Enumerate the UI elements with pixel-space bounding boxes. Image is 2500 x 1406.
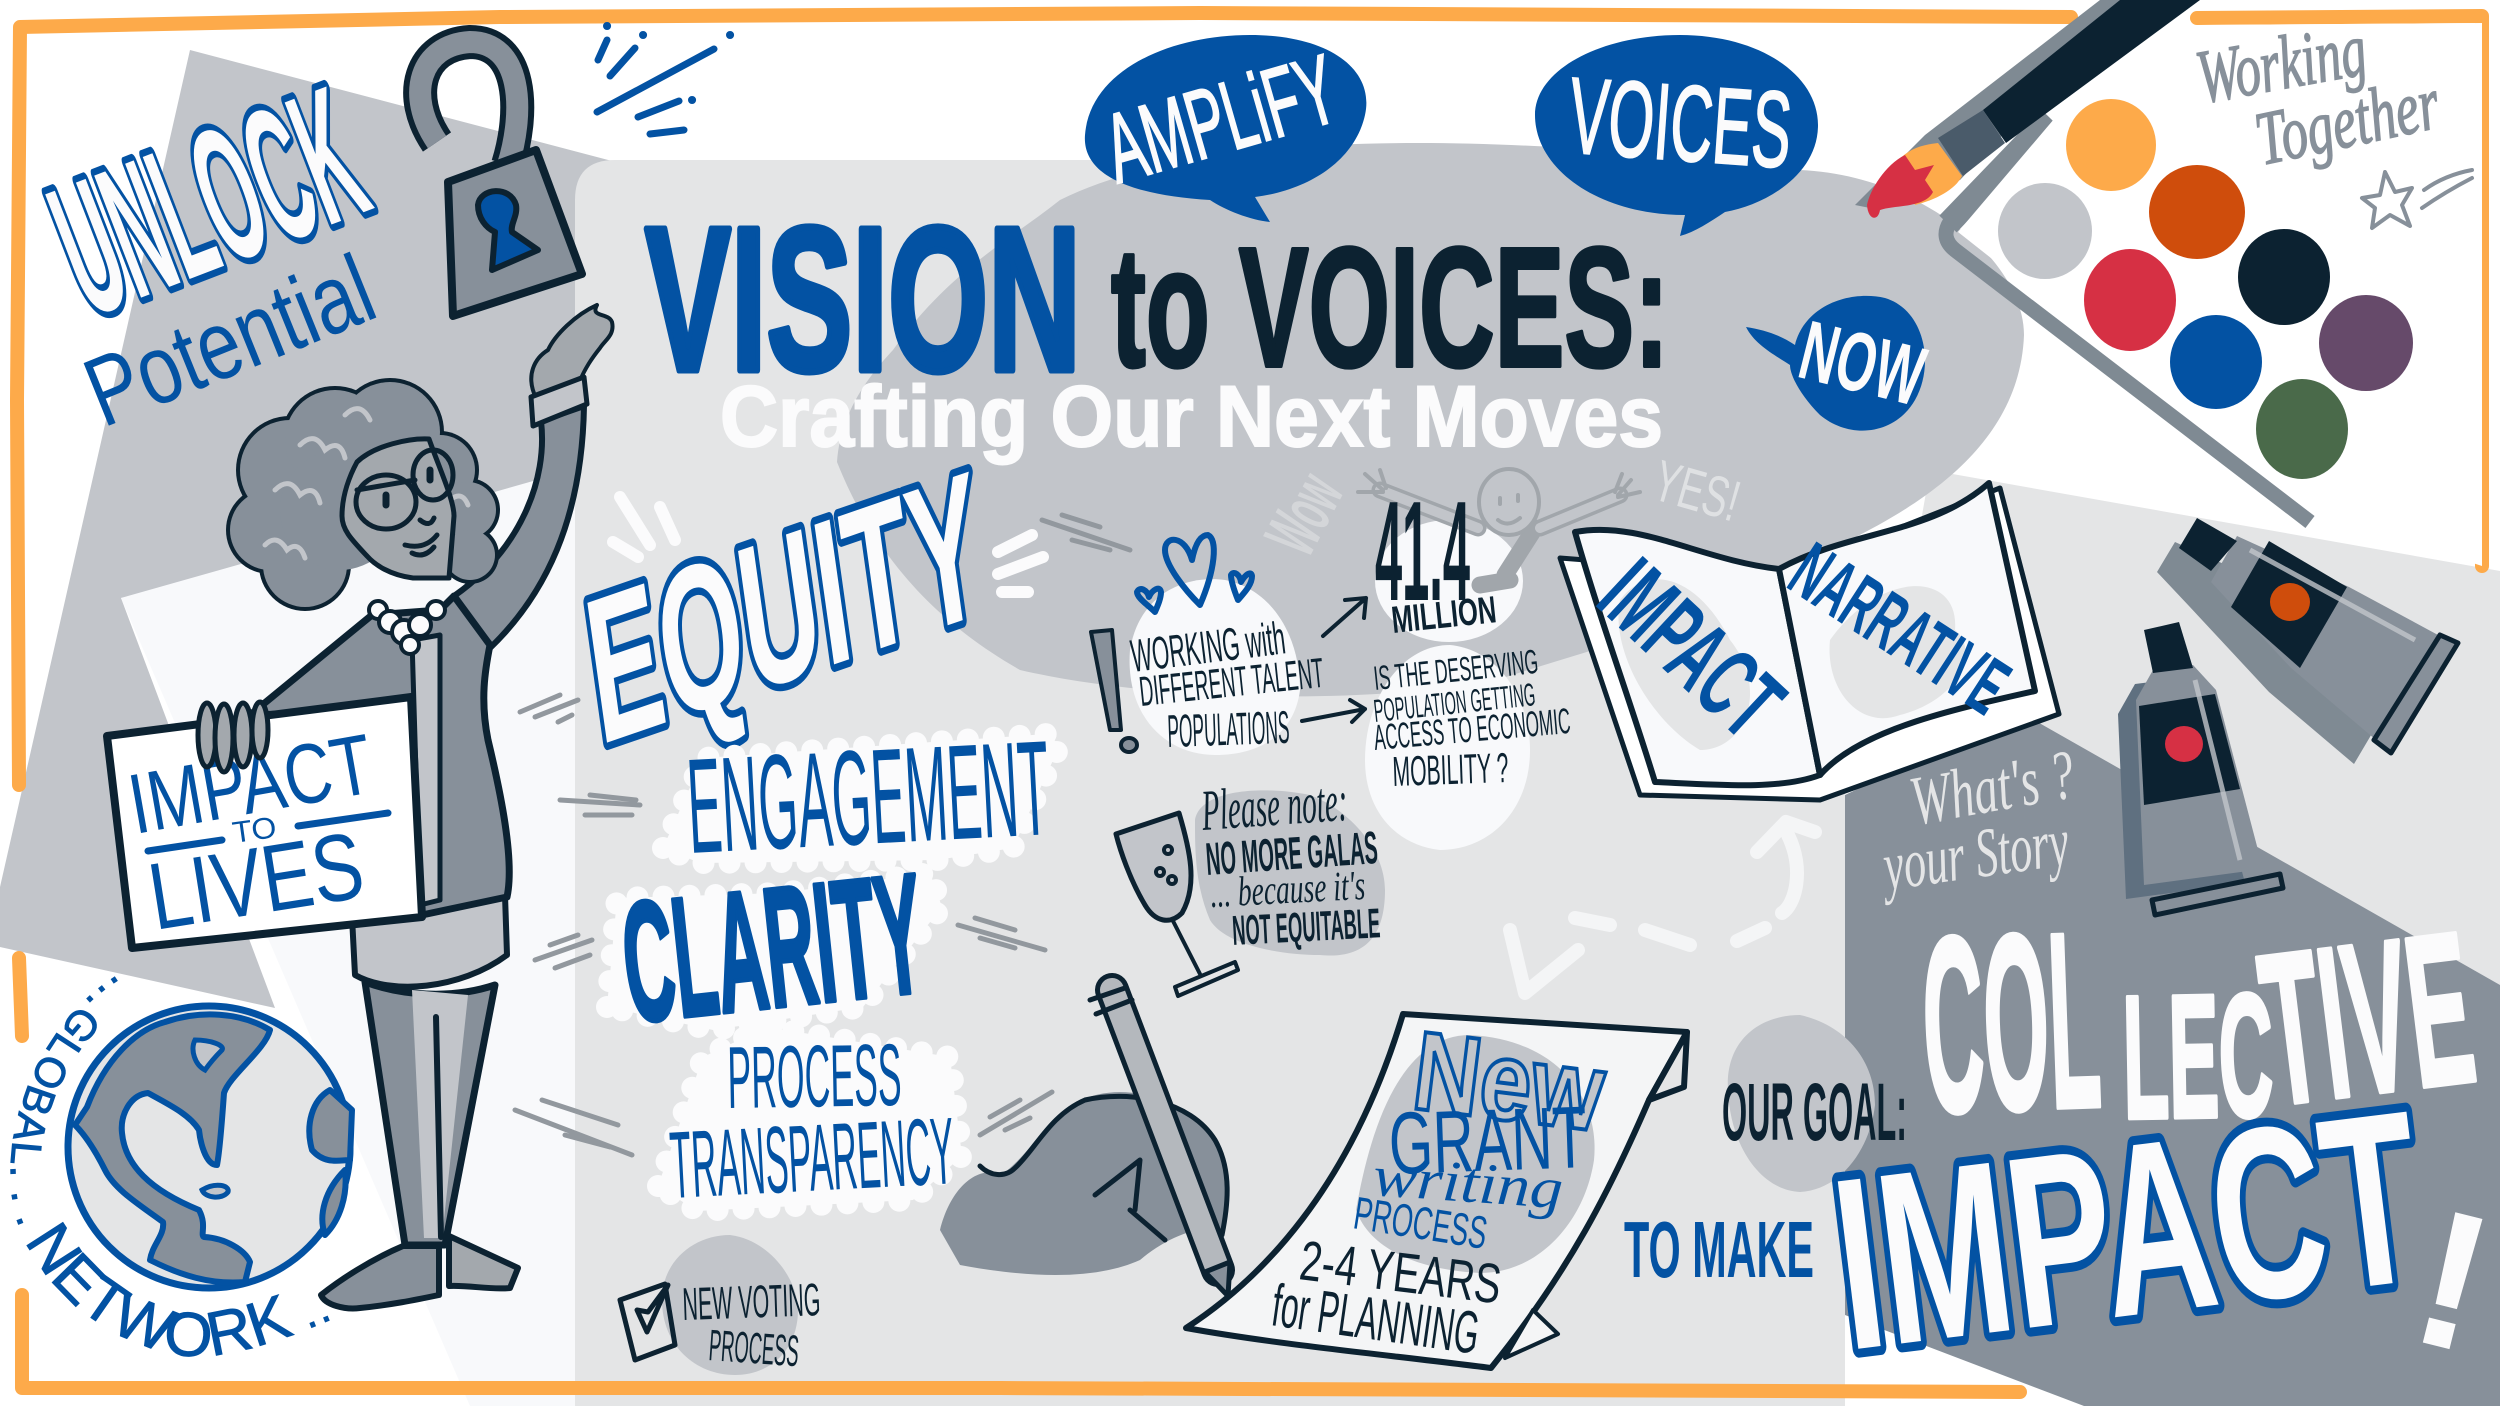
book text: IMPACT: IMPACT <box>1578 538 1804 760</box>
word: ENGAGEMENT with white highlight <box>663 712 1060 882</box>
palette <box>1946 23 2482 566</box>
paint: orange <box>2066 99 2156 191</box>
text: ENGAGEMENT <box>684 712 1053 882</box>
scroll text: GRANT: GRANT <box>1387 1087 1589 1193</box>
paintbrush <box>1855 0 2200 218</box>
word: CLARITY with white highlight <box>607 838 942 1059</box>
text: COLLECTIVE: COL <box>1918 880 2105 1165</box>
paint tube: rust <box>2157 518 2458 764</box>
sign: IMPACT TO LIVES: IMPACT <box>122 717 380 853</box>
icon: hearts <box>1137 535 1252 612</box>
icon: checkbox <box>620 1284 675 1360</box>
background: gray blob behind title <box>837 143 2024 696</box>
stat: 41.4 million: MILLION <box>1390 589 1498 642</box>
speech bubble: VOICES: VOICES <box>1566 54 1795 191</box>
woman: hand <box>531 305 613 398</box>
background: main light panel <box>575 160 1845 1406</box>
book text: NARRATIVE: NARRATIVE <box>1775 526 2025 731</box>
title: to VOICES: to VOICES: <box>1111 213 1669 403</box>
scroll text: PROCESS: PROCESS <box>1350 1187 1491 1259</box>
woman: necklace <box>369 601 445 654</box>
note: NEW VOTING PROCESS: PROCESS <box>707 1321 801 1376</box>
sign: IMPACT TO LIVES: TO <box>230 811 279 850</box>
globe: right continent <box>309 1090 352 1235</box>
white blob: 41.4 million <box>1375 520 1523 642</box>
illustration: new grant scroll <box>1186 1008 1687 1368</box>
text: economic mobility question <box>1372 643 1572 795</box>
burst marks around EQUITY <box>613 497 1043 592</box>
text: economic mobility question: MOBILITY ? <box>1392 744 1509 795</box>
scroll text: New: New <box>1407 1008 1612 1155</box>
text: DIFFERENT TALENT <box>1137 649 1326 715</box>
text: Potential: Potential <box>70 233 389 447</box>
word: PROCESS TRANSPARENCY with white highlight <box>658 1025 962 1219</box>
paint: navy <box>2238 229 2330 325</box>
motion lines <box>515 515 1130 1155</box>
woman: right shoe <box>449 1236 518 1288</box>
globe: land <box>75 1014 270 1283</box>
sign: IMPACT TO LIVES: LIVES <box>142 812 371 951</box>
icon: globe <box>68 1006 352 1288</box>
illustration: hand holding pen <box>940 988 1230 1296</box>
speech bubble: VOICES <box>1535 35 1818 236</box>
icon: cheering person <box>1358 469 1640 585</box>
text: please note no more galas <box>1199 768 1381 954</box>
text: Yes: YES! <box>1646 448 1747 534</box>
background: gray angled panel left <box>0 50 612 1008</box>
text: Working Together <box>2190 7 2447 182</box>
paint tube: red <box>2118 622 2283 915</box>
word: EQUITY: EQUITY <box>574 427 996 788</box>
sign: IMPACT TO LIVES <box>107 697 422 951</box>
sparks near lock <box>597 26 730 134</box>
woman: wristband <box>531 377 587 426</box>
text: What's your story: What's ? <box>1904 736 2080 841</box>
text: GLOBAL NETWORK on curve <box>10 976 330 1357</box>
gray blob: our goal <box>1728 1015 1875 1192</box>
subtitle: Crafting Our Next Moves: Crafting Our Next Moves <box>720 369 1663 465</box>
paint: blue <box>2170 315 2262 409</box>
paint: light gray <box>1998 183 2092 279</box>
speech bubble: AMPLIFY <box>1085 33 1366 222</box>
woman: face <box>342 439 454 578</box>
background: pale angled panel left <box>121 462 600 1406</box>
speech bubble: NOW <box>1746 296 1934 431</box>
woman: hair <box>226 378 500 611</box>
gray blob: note <box>1195 790 1385 956</box>
text: NO MORE GALAS <box>1204 821 1379 885</box>
paint: rust <box>2149 165 2245 259</box>
icon: open padlock <box>420 42 582 316</box>
text: What's your story <box>1875 736 2080 906</box>
text: working with different talent populations <box>1128 611 1326 757</box>
text: ACCESS TO ECONOMIC <box>1372 700 1572 758</box>
paint: green <box>2256 379 2348 479</box>
palette tray <box>1958 23 2482 566</box>
dashed cycle arrow <box>1510 822 1815 993</box>
speech bubble: NOW: NOW <box>1791 302 1934 424</box>
scroll blob <box>1356 1035 1595 1273</box>
note: NEW VOTING PROCESS <box>662 1235 821 1376</box>
text: please note no more galas: Please note: <box>1199 768 1350 843</box>
text: CLARITY <box>614 838 932 1059</box>
text: working with different talent populations: WORKING with <box>1128 611 1288 682</box>
woman: legs <box>365 982 495 1245</box>
text: NEW VOTING <box>682 1273 821 1330</box>
word: PROCESS TRANSPARENCY with white highlight: PROCESS <box>727 1025 902 1127</box>
scroll text: for planning: for PLANNING <box>1268 1272 1483 1367</box>
background: dark panel lower right <box>1845 712 2500 1406</box>
white blob: working with <box>1130 579 1300 755</box>
book: left page <box>1575 530 1820 785</box>
woman: left shoe <box>321 1246 439 1308</box>
text: economic mobility question: POPULATION GETTING <box>1372 676 1537 729</box>
white blob: question <box>1365 645 1530 850</box>
scroll text: 2-4 years: 2-4 YEARS <box>1297 1228 1505 1316</box>
arrow to 41.4 <box>1323 598 1366 636</box>
book: right page <box>1779 483 2035 775</box>
text: POPULATIONS <box>1167 701 1290 757</box>
scroll text: writing: writing <box>1371 1143 1565 1221</box>
illustration: woman with sign <box>107 305 613 1308</box>
text: 41.4 <box>1375 472 1470 631</box>
text: economic mobility question: IS THE DESERVING <box>1372 643 1540 698</box>
woman: fingers over sign <box>198 702 268 772</box>
text: NOT EQUITABLE <box>1231 899 1381 954</box>
title: VISION: VISION <box>645 185 1081 414</box>
icon: exclamation mark <box>1091 630 1137 752</box>
scroll stand <box>1505 1310 1558 1358</box>
woman: skirt <box>352 895 507 987</box>
paint: purple <box>2319 295 2413 391</box>
woman: jacket <box>250 596 509 915</box>
text: COLLECTIVE: LEC <box>2121 958 2275 1156</box>
text: OUR GOAL: <box>1722 1067 1907 1158</box>
pen <box>1090 988 1230 1296</box>
text: Wow: Wow <box>1249 460 1359 568</box>
woman: leg highlight <box>412 990 468 1238</box>
woman: blouse strip <box>412 635 440 905</box>
text: please note no more galas: ... because it's <box>1209 863 1366 917</box>
text: TO MAKE: TO MAKE <box>1624 1205 1814 1294</box>
background: light panel lower right <box>1900 470 2500 1000</box>
book: page clouds <box>1618 579 1966 750</box>
text: TRANSPARENCY <box>668 1098 957 1219</box>
illustration: open book <box>1560 483 2059 800</box>
icon: champagne flute <box>1116 813 1238 996</box>
woman: glasses and features <box>356 450 453 555</box>
paint: red <box>2084 249 2176 351</box>
icon: star with streaks <box>2362 170 2472 228</box>
woman: raised arm <box>454 406 584 648</box>
globe: islands <box>193 1040 228 1197</box>
stat: 41.4 million <box>1375 472 1498 642</box>
text: What's your story: your Story <box>1875 804 2074 906</box>
arrow to question <box>1302 700 1365 722</box>
scroll curl <box>1649 1032 1687 1100</box>
